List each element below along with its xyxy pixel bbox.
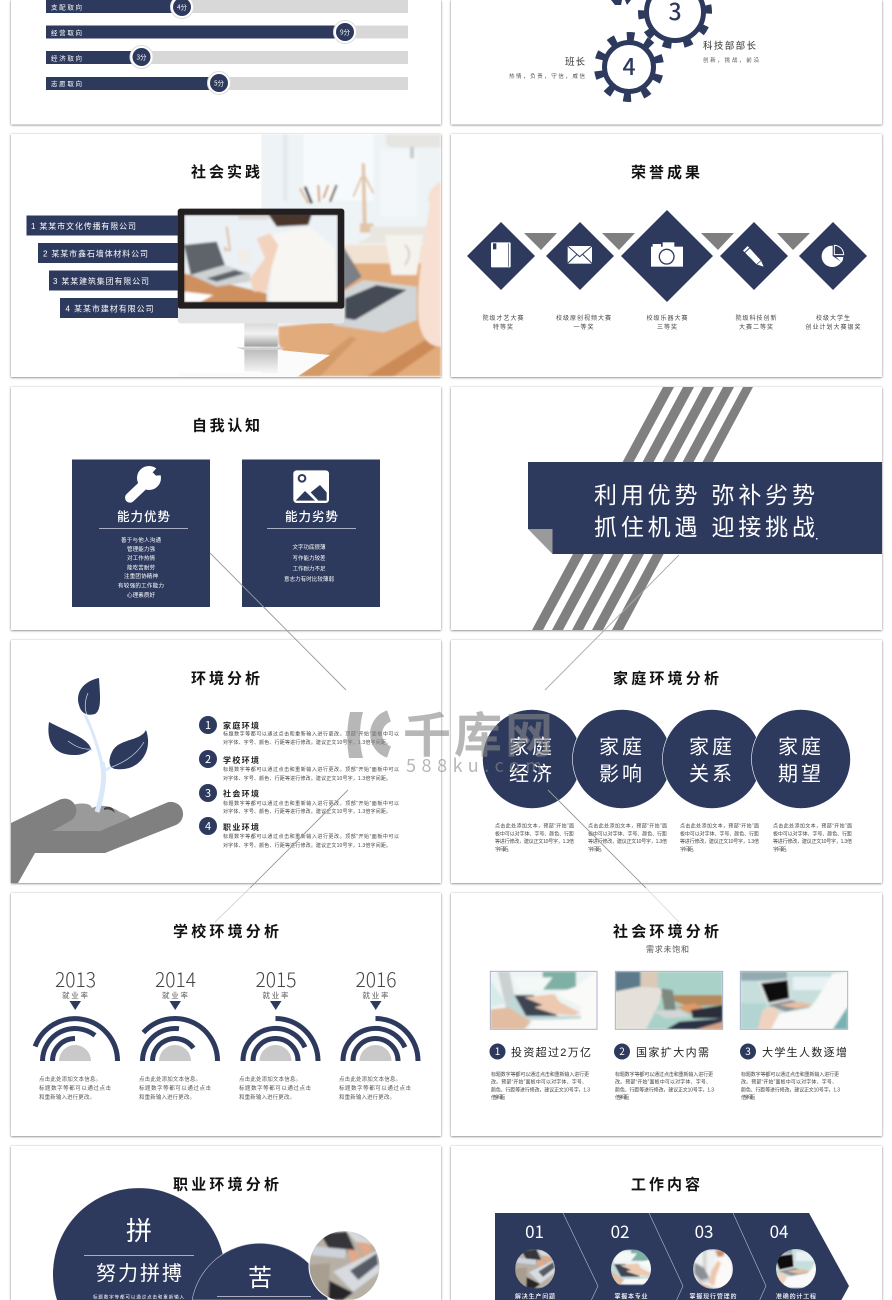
description 1: 等进行修改，建议正文10号字，1.3倍 (495, 838, 574, 845)
card: strengths: 有较强的工作能力 (118, 582, 164, 590)
circle labels: 家庭 (778, 736, 824, 758)
description 4: 板中可以对字体、字号、颜色、行距 (773, 830, 852, 838)
year column 2016: 就业率 (362, 990, 389, 1000)
description 1: 字间距。 (495, 846, 512, 853)
caption: 院级科技创新 (736, 314, 776, 331)
column 3: student numbers: 大学生人数逐增 (762, 1045, 847, 1059)
circle labels: 期望 (778, 762, 824, 786)
panel: environment analysis (11, 640, 441, 883)
item 2: 学校环境: 对字体、字号、颜色、行距等进行修改。建议正文10号字，1.3倍字间距。 (223, 775, 391, 782)
year column 2014: 2014 (155, 964, 196, 993)
year column 2016 (339, 964, 418, 1101)
card: strengths: 善于与他人沟通 (121, 536, 161, 544)
column 1: investment: 倍字间距。 (491, 1094, 508, 1101)
panel: social practice (11, 134, 441, 377)
circle labels: 经济 (509, 762, 555, 786)
step 04: 04 (770, 1218, 788, 1243)
year column 2014: 点击此处添加文本信息。 (139, 1075, 201, 1083)
heading: 社会实践: 社会实践 (191, 163, 260, 181)
list: company names (26, 216, 178, 318)
caption: 校级大学生: 创业计划大赛银奖 (806, 323, 860, 331)
icons inside diamonds (491, 242, 844, 267)
column 2: domestic demand (614, 971, 723, 1101)
description 4: 等进行修改，建议正文10号字，1.3倍 (773, 838, 852, 845)
step 04 (770, 1226, 816, 1300)
year column 2013 (35, 964, 118, 1101)
description 4 (773, 822, 852, 853)
watermark: 千库网 588ku.com: 588ku.com (406, 752, 542, 778)
panel: work content (451, 1146, 882, 1300)
description 3 (680, 822, 759, 853)
chevron dividers (563, 1213, 766, 1300)
item 3: 社会环境: 标题数字等都可以通过点击和重新输入进行更改。顶部“开始”面板中可以 (223, 800, 399, 807)
role: 科技部部长: 创新，挑战，前沿 (703, 56, 759, 64)
bar labels (51, 2, 82, 88)
column 2: domestic demand: 国家扩大内需 (636, 1045, 709, 1059)
bar fills (46, 0, 345, 90)
year column 2016: 点击此处添加文本信息。 (339, 1075, 401, 1083)
score badge: 9分: 9分 (340, 26, 351, 36)
year column 2013: 和重新输入进行更改。 (39, 1093, 95, 1101)
item 4: 职业环境: 4 (205, 818, 211, 834)
card: strengths: 注重团协精神 (124, 572, 158, 580)
step 01: 01 (525, 1218, 544, 1243)
circle labels (509, 736, 824, 786)
item 4: 职业环境: 标题数字等都可以通过点击和重新输入进行更改。顶部“开始”面板中可以 (223, 833, 399, 840)
icon: pencil (743, 246, 764, 267)
subheading: 需求未饱和: 需求未饱和 (646, 944, 689, 954)
panel: self cognition (11, 387, 441, 630)
score badge: 4分 (170, 0, 194, 18)
year column 2016: 标题数字等都可以通过点击 (339, 1084, 411, 1092)
card: strengths: 对工作热情 (127, 554, 155, 562)
card: strengths: 能力优势 (117, 509, 170, 524)
card: weaknesses: 意志力有时比较薄弱 (284, 575, 334, 583)
caption: 校级乐器大赛: 三等奖 (657, 323, 677, 331)
step 02 (611, 1226, 651, 1300)
description 3: 板中可以对字体、字号、颜色、行距 (680, 830, 759, 838)
description 2: 点击此处添加文本，预部“开始”面 (588, 822, 667, 830)
watermark: 千库网 588ku.com (347, 710, 553, 778)
banner with slogan: 抓住机遇 迎接挑战 (594, 514, 815, 540)
medium circle: 苦: 苦 (248, 1265, 272, 1292)
heading: 家庭环境分析: 家庭环境分析 (613, 670, 719, 688)
chevron band (495, 1213, 849, 1300)
heading: 学校环境分析: 学校环境分析 (173, 922, 279, 940)
year column 2016: 2016 (356, 964, 396, 993)
card: strengths (72, 460, 210, 607)
watermark: 千库网 588ku.com: 千库网 (403, 710, 553, 763)
big circle: 拼: 拼 (126, 1216, 152, 1246)
icon: gear 4 (596, 34, 662, 100)
big circle: 拼: 努力拼搏 (96, 1262, 182, 1285)
column 2: domestic demand: 标题数字等都可以通过点击和重新输入进行更 (615, 1071, 713, 1078)
year column 2015: 和重新输入进行更改。 (239, 1093, 295, 1101)
year column 2013: 2013 (55, 964, 96, 993)
item 2: 学校环境: 学校环境 (223, 755, 259, 765)
score badge: 5分: 5分 (214, 78, 225, 88)
caption: 校级原创视频大赛: 一等奖 (574, 323, 594, 331)
big circle: 拼 (53, 1188, 225, 1300)
step 03: 03 (695, 1218, 713, 1243)
caption: 院级才艺大赛: 特等奖 (493, 323, 513, 331)
column 3: student numbers: 改。预部“开始”面板中可以对字体、字号、 (741, 1078, 837, 1086)
column 3: student numbers: 标题数字等都可以通过点击和重新输入进行更 (741, 1071, 839, 1078)
gray triangles (524, 233, 810, 250)
year column 2014 (139, 964, 218, 1101)
item 3: 社会环境: 对字体、字号、颜色、行距等进行修改。建议正文10号字，1.3倍字间距。 (223, 808, 391, 815)
description 1: 点击此处添加文本，预部“开始”面 (495, 822, 574, 830)
item 3: 社会环境 (199, 784, 399, 815)
bar labels: 志愿取向 (51, 79, 82, 88)
description 1: 板中可以对字体、字号、颜色、行距 (495, 830, 574, 838)
column 2: domestic demand: 倍字间距。 (615, 1094, 632, 1101)
panel: social environment (451, 893, 882, 1136)
card: weaknesses: 能力劣势 (285, 509, 338, 524)
bar labels: 支配取向 (51, 2, 82, 12)
year column 2013: 标题数字等都可以通过点击 (39, 1084, 111, 1092)
column 2: domestic demand: 颜色、行距等进行修改，建议正文10号字，1.3 (615, 1086, 714, 1094)
description 2 (588, 822, 667, 853)
panel: family environment (451, 640, 882, 883)
panel: honors (451, 134, 882, 377)
item 4: 职业环境 (199, 817, 399, 849)
column 2: domestic demand: 2 (619, 1043, 625, 1058)
description 4: 字间距。 (773, 846, 790, 853)
card: weaknesses: 写作能力较差 (292, 554, 326, 562)
icon: wrench (130, 465, 165, 498)
column 3: student numbers (740, 971, 848, 1101)
icon: picture (293, 470, 329, 503)
caption: 校级大学生 (806, 314, 860, 331)
icon: book (491, 242, 511, 267)
column 3: student numbers: 颜色、行距等进行修改，建议正文10号字，1.3 (741, 1086, 840, 1094)
icon: gear 4: 4 (622, 48, 636, 82)
panel: slogan banner (451, 387, 882, 630)
list: company names: 4 某某市建材有限公司 (66, 304, 154, 314)
column 1: investment (490, 971, 597, 1101)
heading: 自我认知: 自我认知 (192, 416, 260, 434)
role: 班长: 热情，负责，守信，威信 (509, 72, 585, 80)
icon: camera (651, 242, 683, 267)
card: weaknesses: 文字功底很薄 (292, 543, 326, 551)
item 3: 社会环境: 社会环境 (223, 788, 259, 798)
year column 2014: 和重新输入进行更改。 (139, 1093, 195, 1101)
column 1: investment: 标题数字等都可以通过点击和重新输入进行更 (491, 1071, 589, 1078)
card: strengths: 能吃苦耐劳 (127, 564, 155, 572)
role: 科技部部长: 科技部部长 (703, 40, 756, 52)
year column 2015 (239, 964, 318, 1101)
photo circle: laptop typing (308, 1230, 381, 1300)
bar labels: 经济取向 (51, 54, 82, 62)
circle labels: 家庭 (509, 736, 555, 758)
item 2: 学校环境: 2 (205, 751, 211, 767)
caption: 院级科技创新: 大赛二等奖 (739, 323, 773, 331)
monitor with photo (178, 209, 344, 377)
score badge: 5分 (208, 72, 230, 94)
year column 2015: 就业率 (262, 990, 289, 1000)
year column 2013: 点击此处添加文本信息。 (39, 1075, 101, 1083)
item 2: 学校环境 (199, 750, 399, 782)
year column 2015: 标题数字等都可以通过点击 (239, 1084, 311, 1092)
column 1: investment: 1 (495, 1043, 500, 1058)
panel: career orientation bars (11, 0, 441, 124)
circle labels: 家庭 (689, 736, 735, 758)
panel: career environment (11, 1146, 441, 1300)
item 4: 职业环境: 职业环境 (223, 822, 259, 832)
description 2: 字间距。 (588, 846, 605, 853)
score badge: 9分 (334, 20, 356, 44)
card: weaknesses: 工作耐力不足 (292, 564, 326, 572)
circle labels: 关系 (689, 762, 735, 786)
circle labels: 影响 (599, 762, 645, 786)
panel: roles gears (451, 0, 882, 124)
caption: 校级大学生: 校级大学生 (816, 314, 850, 322)
bar tracks (46, 0, 408, 90)
role: 班长 (509, 56, 585, 80)
card: strengths: 心理素质好 (127, 591, 155, 599)
caption: 院级才艺大赛: 院级才艺大赛 (482, 314, 524, 322)
description 3: 点击此处添加文本，预部“开始”面 (680, 822, 759, 830)
caption: 校级原创视频大赛 (556, 314, 611, 331)
description 3: 等进行修改，建议正文10号字，1.3倍 (680, 838, 759, 845)
icon: envelope (568, 246, 592, 264)
list: company names: 1 某某市文化传播有限公司 (31, 221, 136, 231)
diagonal overlay lines (210, 553, 679, 922)
list: company names: 2 某某市鑫石墙体材料公司 (43, 248, 148, 258)
description 1 (495, 822, 574, 853)
column 1: investment: 改。预部“开始”面板中可以对字体、字号、 (491, 1078, 587, 1086)
score badge: 4分: 4分 (177, 2, 188, 12)
diamonds (467, 210, 867, 302)
card: strengths: 管理能力强 (127, 545, 155, 553)
heading: 荣誉成果: 荣誉成果 (631, 164, 700, 182)
caption: 校级乐器大赛: 校级乐器大赛 (646, 314, 688, 322)
step 03 (690, 1218, 736, 1300)
illustration: plant in hand (11, 678, 183, 883)
circles row (482, 710, 850, 808)
list: company names: 3 某某建筑集团有限公司 (53, 276, 149, 286)
circle labels: 家庭 (599, 736, 645, 758)
item 2: 学校环境: 标题数字等都可以通过点击和重新输入进行更改。顶部“开始”面板中可以 (223, 766, 399, 773)
item 1: 家庭环境: 家庭环境 (223, 720, 259, 730)
diagonal stripes (532, 387, 753, 630)
column 1: investment: 颜色、行距等进行修改，建议正文10号字，1.3 (491, 1086, 590, 1094)
panel: school environment (11, 893, 441, 1136)
step 01 (515, 1226, 555, 1300)
heading: 工作内容: 工作内容 (631, 1176, 700, 1194)
role: 班长: 班长 (565, 56, 585, 68)
caption: 院级科技创新: 院级科技创新 (736, 314, 776, 322)
heading: 社会环境分析: 社会环境分析 (613, 922, 719, 940)
icon: partial gear top (611, 0, 631, 5)
description 4: 点击此处添加文本，预部“开始”面 (773, 822, 852, 830)
card: weaknesses (242, 460, 380, 607)
step 02: 02 (611, 1218, 629, 1243)
description 3: 字间距。 (680, 846, 697, 853)
year column 2015: 点击此处添加文本信息。 (239, 1075, 301, 1083)
column 2: domestic demand: 改。预部“开始”面板中可以对字体、字号、 (615, 1078, 711, 1086)
caption: 院级才艺大赛 (482, 314, 524, 331)
icon: pie chart (822, 245, 844, 267)
heading: 环境分析: 环境分析 (191, 670, 260, 688)
icon: gear 3 (636, 0, 714, 51)
score badge: 3分 (130, 46, 153, 68)
item 4: 职业环境: 对字体、字号、颜色、行距等进行修改。建议正文10号字，1.3倍字间距。 (223, 842, 391, 849)
banner with slogan (528, 462, 882, 554)
year column 2014: 标题数字等都可以通过点击 (139, 1084, 211, 1092)
heading: 职业环境分析: 职业环境分析 (173, 1176, 279, 1194)
caption: 校级原创视频大赛: 校级原创视频大赛 (556, 314, 611, 322)
year column 2015: 2015 (256, 964, 296, 993)
item 1: 家庭环境: 1 (205, 717, 211, 733)
photo: desk scene background (261, 134, 441, 377)
year column 2016: 和重新输入进行更改。 (339, 1093, 395, 1101)
year column 2013: 就业率 (62, 990, 88, 1000)
item 1: 家庭环境: 对字体、字号、颜色、行距等进行修改。建议正文10号字，1.3倍字间距。 (223, 739, 391, 746)
bar labels: 经营取向 (51, 28, 82, 37)
item 3: 社会环境: 3 (205, 785, 211, 801)
score badge: 3分: 3分 (136, 52, 147, 62)
banner with slogan: 利用优势 弥补劣势 (594, 482, 815, 508)
caption: 校级乐器大赛 (646, 314, 688, 331)
column 3: student numbers: 倍字间距。 (741, 1094, 758, 1101)
column 3: student numbers: 3 (745, 1043, 751, 1058)
item 1: 家庭环境 (199, 716, 399, 746)
year column 2014: 就业率 (162, 990, 188, 1000)
description 2: 等进行修改，建议正文10号字，1.3倍 (588, 838, 667, 845)
column 1: investment: 投资超过2万亿 (511, 1045, 591, 1059)
role: 科技部部长 (703, 40, 759, 64)
big circle: 拼: 标题数字等都可以通过点击和重新输入 (93, 1294, 184, 1300)
description 2: 板中可以对字体、字号、颜色、行距 (588, 830, 667, 838)
item 1: 家庭环境: 标题数字等都可以通过点击和重新输入进行更改。顶部“开始”面板中可以 (223, 730, 399, 738)
medium circle: 苦 (192, 1243, 328, 1300)
